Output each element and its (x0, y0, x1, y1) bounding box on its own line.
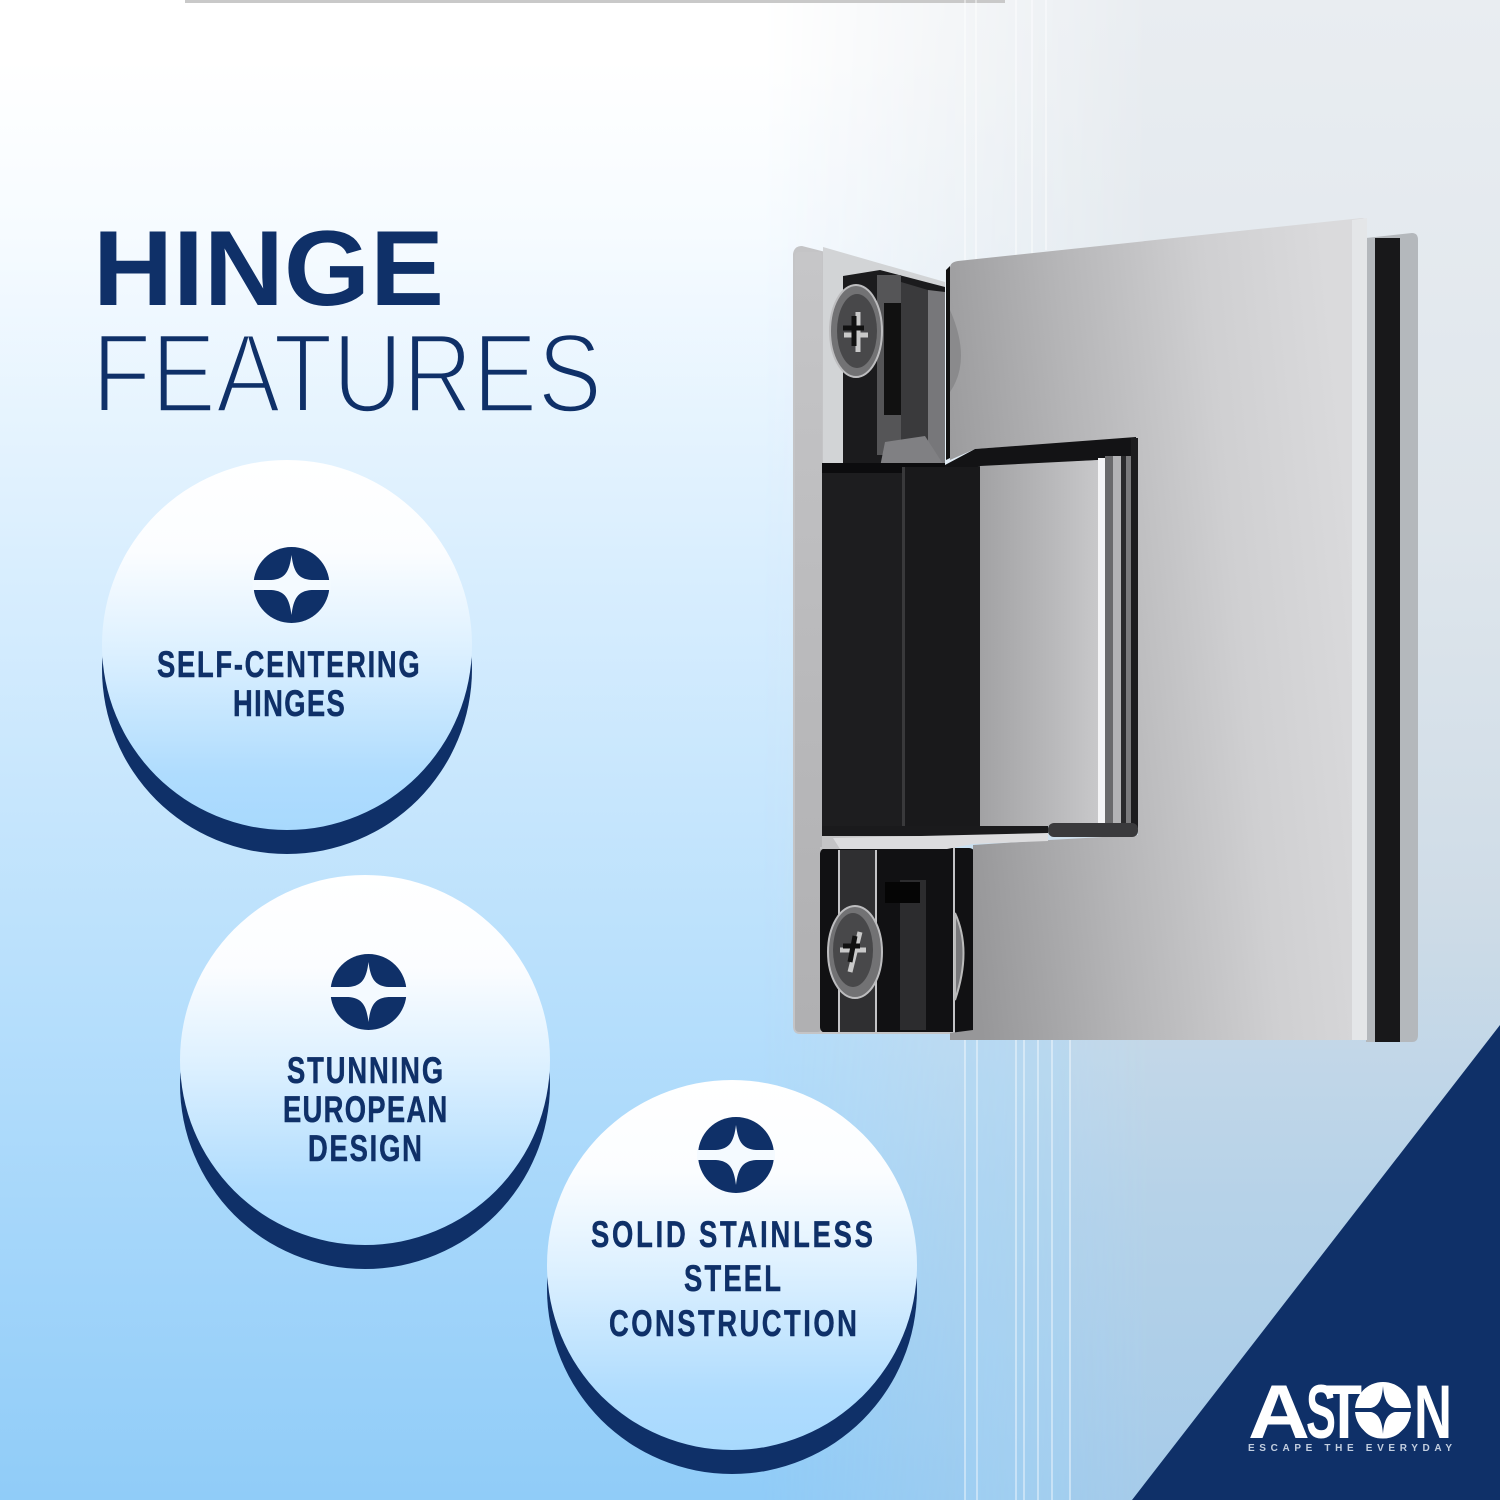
label: CONSTRUCTION (609, 1303, 857, 1344)
roller (1048, 823, 1138, 837)
title: HINGE (93, 208, 444, 328)
logo: T (1326, 1370, 1362, 1455)
label: DESIGN (308, 1128, 422, 1169)
label: SELF-CENTERING (157, 644, 420, 685)
crescent (547, 1104, 917, 1474)
label (591, 1214, 873, 1344)
bottom screw (828, 906, 882, 998)
logo star (1352, 1382, 1414, 1438)
disc (180, 875, 550, 1245)
back pivot (950, 310, 961, 392)
logo: O (1355, 1370, 1411, 1455)
crescent (102, 484, 472, 854)
central barrel polished (980, 438, 1138, 828)
main plate (950, 218, 1367, 1040)
back plate (1366, 233, 1418, 1042)
label: SOLID STAINLESS (591, 1214, 873, 1255)
disc (547, 1080, 917, 1450)
logo: N (1414, 1370, 1452, 1455)
top recess (843, 270, 945, 467)
top screw (830, 285, 882, 377)
left plate facet (823, 247, 945, 470)
logo: S (1306, 1370, 1336, 1455)
logo (1248, 1370, 1452, 1455)
label: STUNNING (287, 1050, 443, 1091)
tagline: ESCAPE THE EVERYDAY (1248, 1443, 1452, 1454)
corner triangle (1132, 1025, 1500, 1500)
icon: star badge (252, 547, 330, 623)
label: STEEL (684, 1258, 781, 1299)
label (157, 644, 420, 724)
label: EUROPEAN (283, 1089, 447, 1130)
label (283, 1050, 447, 1169)
left edge strip (795, 252, 822, 1032)
logo: A (1248, 1370, 1310, 1455)
hinge knuckle edge (945, 268, 1136, 468)
crescent (180, 899, 550, 1269)
icon: star badge (697, 1117, 775, 1193)
disc (102, 460, 472, 830)
feature 3 (547, 1080, 917, 1474)
main plate bright edge (1352, 218, 1367, 1040)
lower ledge (822, 826, 1048, 849)
left plate (793, 246, 943, 1034)
icon: star badge (330, 954, 408, 1030)
hinge photo (793, 218, 1418, 1042)
label: HINGES (233, 683, 345, 724)
feature 1 (102, 460, 472, 854)
title: FEATURES (92, 311, 602, 436)
title (92, 208, 602, 436)
central barrel dark (822, 463, 980, 830)
feature 2 (180, 875, 550, 1269)
bottom recess (820, 845, 975, 1033)
